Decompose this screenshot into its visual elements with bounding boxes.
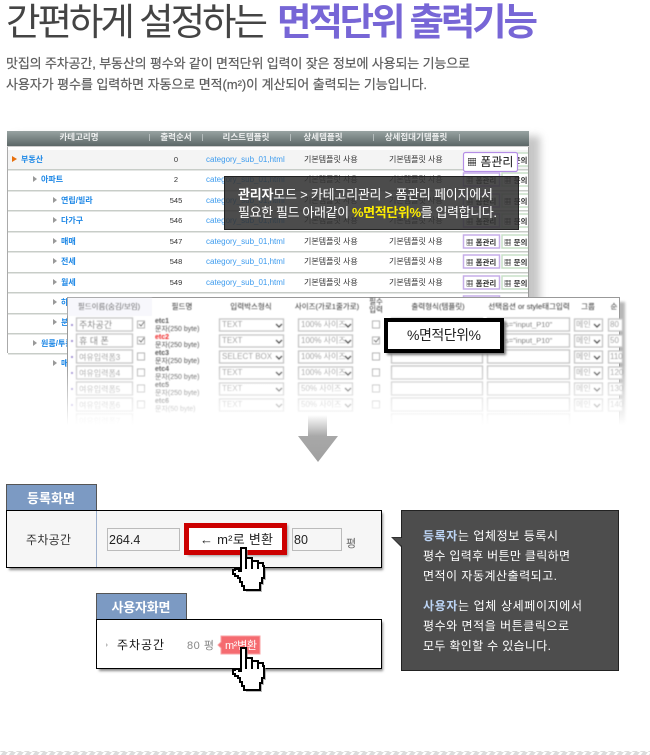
input type selects: TEXT (222, 320, 243, 329)
tab: registration screen (6, 484, 96, 510)
field table header: 필드이름(숨김/보임) (78, 301, 141, 311)
category names: 분양 (61, 317, 76, 327)
table header: 상세접대기템플릿 (385, 132, 447, 142)
callout: admin mode instruction (224, 176, 518, 230)
order inputs: 130 (610, 384, 624, 393)
field identifiers: etc3 (155, 350, 169, 357)
form manage buttons: ▦ 문의 (504, 257, 527, 267)
group selects: 메인 (576, 399, 591, 409)
category names: 부동산 (21, 154, 44, 164)
title (6, 1, 538, 43)
input type selects: TEXT (222, 368, 243, 377)
template usage columns: 기본템플릿 사용 (389, 277, 443, 287)
field identifiers: 문자(250 byte) (155, 356, 199, 365)
field name inputs: 주차공간 (79, 319, 112, 330)
callout: explanation: 모두 확인할 수 있습니다. (423, 639, 551, 653)
callout: explanation: 사용자는 업체 상세페이지에서 (423, 599, 582, 613)
size selects (298, 319, 352, 411)
template links column: category_sub_01,html (206, 237, 285, 246)
group selects: 메인 (576, 383, 591, 393)
field identifiers: etc5 (155, 382, 169, 389)
order inputs: 120 (610, 368, 624, 377)
group selects: 메인 (576, 319, 591, 329)
form manage buttons: ▦ 문의 (504, 155, 527, 165)
style option inputs (488, 318, 570, 427)
form manage buttons: ▦ 폼관리 (466, 237, 496, 247)
input type selects: SELECT BOX (222, 352, 273, 361)
convert tag: m²변환 (225, 639, 257, 652)
field table header: 출력형식(템플릿) (411, 301, 465, 311)
field table header: 입력 (369, 305, 383, 314)
template links column: category_sub_01,html (206, 155, 285, 164)
size selects: 100% 사이즈 (301, 367, 346, 377)
size selects: 50% 사이즈 (301, 399, 341, 409)
group selects: 메인 (576, 367, 591, 377)
form manage buttons: ▦ 폼관리 (466, 196, 496, 206)
form manage buttons: ▦ 문의 (504, 216, 527, 226)
group selects: 메인 (576, 335, 591, 345)
field name inputs (71, 318, 132, 427)
callout: admin mode instruction: 관리자모드 > 카테고리관리 > 폼관리 페이지에서 (238, 187, 493, 202)
field table header: 그룹 (581, 302, 595, 311)
category names: 다가구 (61, 215, 84, 225)
field name inputs: 여유입력폼3 (79, 352, 121, 362)
field name inputs: 여유입력폼7 (79, 416, 121, 426)
enlarged form manage button (464, 152, 518, 172)
callout: area unit tag: %면적단위% (407, 327, 481, 343)
template links column: category_sub_01,html (206, 278, 285, 287)
category names: 전세 (61, 256, 76, 266)
panel: form field settings (68, 296, 625, 432)
category names: 월세 (61, 277, 76, 287)
field name inputs: 휴 대 폰 (79, 336, 109, 346)
form manage buttons: ▦ 폼관리 (466, 278, 496, 288)
template links column: category_sub_01,html (206, 175, 285, 184)
group selects: 메인 (576, 351, 591, 361)
group selects (574, 319, 602, 411)
convert button: ← m²로 변환 (200, 532, 273, 547)
template usage columns: 기본템플릿 사용 (304, 256, 358, 266)
tab: user screen (96, 594, 186, 620)
field identifiers: etc4 (155, 366, 169, 373)
size selects: 50% 사이즈 (301, 383, 341, 393)
category names: 연립/빌라 (61, 195, 93, 205)
table header: 리스트템플릿 (223, 132, 270, 142)
size selects: 100% 사이즈 (301, 335, 346, 345)
convert tag (218, 636, 260, 654)
template usage columns: 기본템플릿 사용 (304, 236, 358, 246)
field table header: 필드명 (172, 301, 192, 311)
output order column: 546 (170, 216, 182, 225)
template links column: category_sub_01,html (206, 257, 285, 266)
input type selects: TEXT (222, 384, 243, 393)
template usage columns: 기본템플릿 사용 (304, 174, 358, 184)
template links column (206, 155, 285, 287)
field label: 주차공간 (26, 533, 71, 547)
form manage buttons: ▦ 폼관리 (466, 216, 496, 226)
table header: 카테고리명 (59, 132, 99, 142)
area input: 264.4 (109, 533, 140, 547)
field table header: 필수 (369, 296, 383, 306)
form manage buttons: ▦ 폼관리 (466, 175, 496, 185)
field identifiers (155, 318, 199, 413)
area input (108, 528, 180, 550)
form manage buttons: ▦ 폼관리 (466, 257, 496, 267)
arrow: down (298, 415, 338, 462)
field name inputs: 여유입력폼4 (79, 368, 121, 378)
table header (7, 131, 529, 147)
field table header: 사이즈(가로1줄가로) (295, 301, 360, 311)
description text: 사용자가 평수를 입력하면 자동으로 면적(m²)이 계산되어 출력되는 기능입니다. (6, 77, 427, 92)
icon: hand cursor (233, 548, 266, 592)
form manage buttons (462, 152, 528, 297)
template usage columns: 기본템플릿 사용 (304, 154, 358, 164)
field identifiers: etc6 (155, 398, 169, 405)
template links column: category_sub_01,html (206, 196, 285, 205)
template usage columns: 기본템플릿 사용 (389, 215, 443, 225)
callout: admin mode instruction: 필요한 필드 아래같이 %면적단위%를 입력합니다. (238, 205, 497, 220)
category names: 원룸/투룸 (41, 338, 73, 348)
style option inputs: s="input_P10" (505, 320, 553, 329)
field identifiers: 문자(250 byte) (155, 372, 199, 381)
enlarged form manage button: ▦ 폼관리 (467, 155, 513, 169)
template usage columns: 기본템플릿 사용 (304, 195, 358, 205)
value: 80 평 (187, 639, 214, 652)
field identifiers: 문자(250 byte) (155, 388, 199, 397)
output order column: 545 (170, 196, 182, 205)
unit label: 평 (346, 537, 356, 550)
pyeong input (292, 528, 342, 550)
order inputs: 80 (610, 320, 619, 329)
size selects: 100% 사이즈 (301, 319, 346, 329)
output format inputs (392, 318, 482, 427)
description text: 맛집의 주차공간, 부동산의 평수와 같이 면적단위 입력이 잦은 정보에 사용되는 기능으로 (6, 56, 470, 71)
template usage columns: 기본템플릿 사용 (389, 256, 443, 266)
tab: user screen: 사용자화면 (112, 600, 170, 615)
template usage columns: 기본템플릿 사용 (304, 277, 358, 287)
field name inputs: 여유입력폼6 (79, 400, 121, 410)
output order column: 548 (170, 257, 182, 266)
size selects: 100% 사이즈 (301, 351, 346, 361)
output order column: 547 (170, 237, 182, 246)
callout: explanation: 면적이 자동계산출력되고. (423, 569, 557, 583)
category names (12, 154, 93, 368)
form manage buttons: ▦ 문의 (504, 237, 527, 247)
panel: user view (96, 620, 383, 671)
order inputs: 50 (610, 336, 619, 345)
input type selects: TEXT (222, 400, 243, 409)
input type selects: TEXT (222, 336, 243, 345)
template links column: category_sub_01,html (206, 216, 285, 225)
template usage columns: 기본템플릿 사용 (389, 154, 443, 164)
tab: registration screen: 등록화면 (27, 491, 75, 506)
callout: explanation: 등록자는 업체정보 등록시 (423, 529, 558, 543)
category names: 하숙 (61, 297, 76, 307)
category names: 매매 (61, 236, 76, 246)
order inputs: 140 (610, 400, 624, 409)
required checkboxes (372, 321, 380, 408)
field table header: 순 (611, 302, 618, 311)
icon: hand cursor (233, 648, 266, 692)
field identifiers: etc2 (155, 334, 169, 341)
table header: 상세템플릿 (303, 132, 343, 142)
callout: explanation: 평수 입력후 버튼만 클릭하면 (423, 549, 570, 563)
table header: 출력순서 (160, 132, 192, 142)
convert button (186, 525, 288, 556)
callout: explanation: 평수와 면적을 버튼클릭으로 (423, 619, 569, 633)
input type selects (220, 319, 284, 411)
output order column: 549 (170, 278, 182, 287)
title: 면적단위 출력기능 (277, 1, 538, 43)
description text (6, 56, 470, 92)
callout: explanation (391, 510, 618, 670)
field identifiers: 문자(250 byte) (155, 340, 199, 349)
order inputs: 110 (610, 352, 623, 361)
field label: 주차공간 (117, 638, 164, 652)
template usage columns: 기본템플릿 사용 (389, 174, 443, 184)
field table header: 입력박스형식 (230, 301, 272, 311)
template usage columns (304, 154, 443, 287)
field identifiers: 문자(250 byte) (155, 324, 199, 333)
template usage columns: 기본템플릿 사용 (304, 215, 358, 225)
template usage columns: 기본템플릿 사용 (389, 236, 443, 246)
output order column: 0 (174, 155, 178, 164)
template usage columns: 기본템플릿 사용 (389, 195, 443, 205)
field table header: 선택옵션 or style태그입력 (488, 301, 570, 311)
title: 간편하게 설정하는 (6, 1, 268, 43)
category names: 매매 (61, 358, 76, 368)
pyeong input: 80 (294, 533, 308, 547)
show checkboxes (138, 321, 144, 408)
form manage buttons: ▦ 문의 (504, 175, 527, 185)
field identifiers: etc1 (155, 318, 169, 325)
field name inputs: 여유입력폼5 (79, 384, 121, 394)
callout: area unit tag (386, 320, 506, 355)
order inputs (608, 319, 624, 411)
style option inputs: s="input_P10" (505, 336, 553, 345)
category names: 아파트 (41, 174, 64, 184)
field identifiers: 문자(50 byte) (155, 404, 196, 413)
field table header (68, 296, 618, 316)
output order column (170, 155, 182, 287)
panel: category admin table (7, 131, 540, 371)
form manage buttons: ▦ 문의 (504, 196, 527, 206)
panel: registration form (6, 510, 383, 570)
output order column: 2 (174, 175, 178, 184)
form manage buttons: ▦ 문의 (504, 278, 527, 288)
